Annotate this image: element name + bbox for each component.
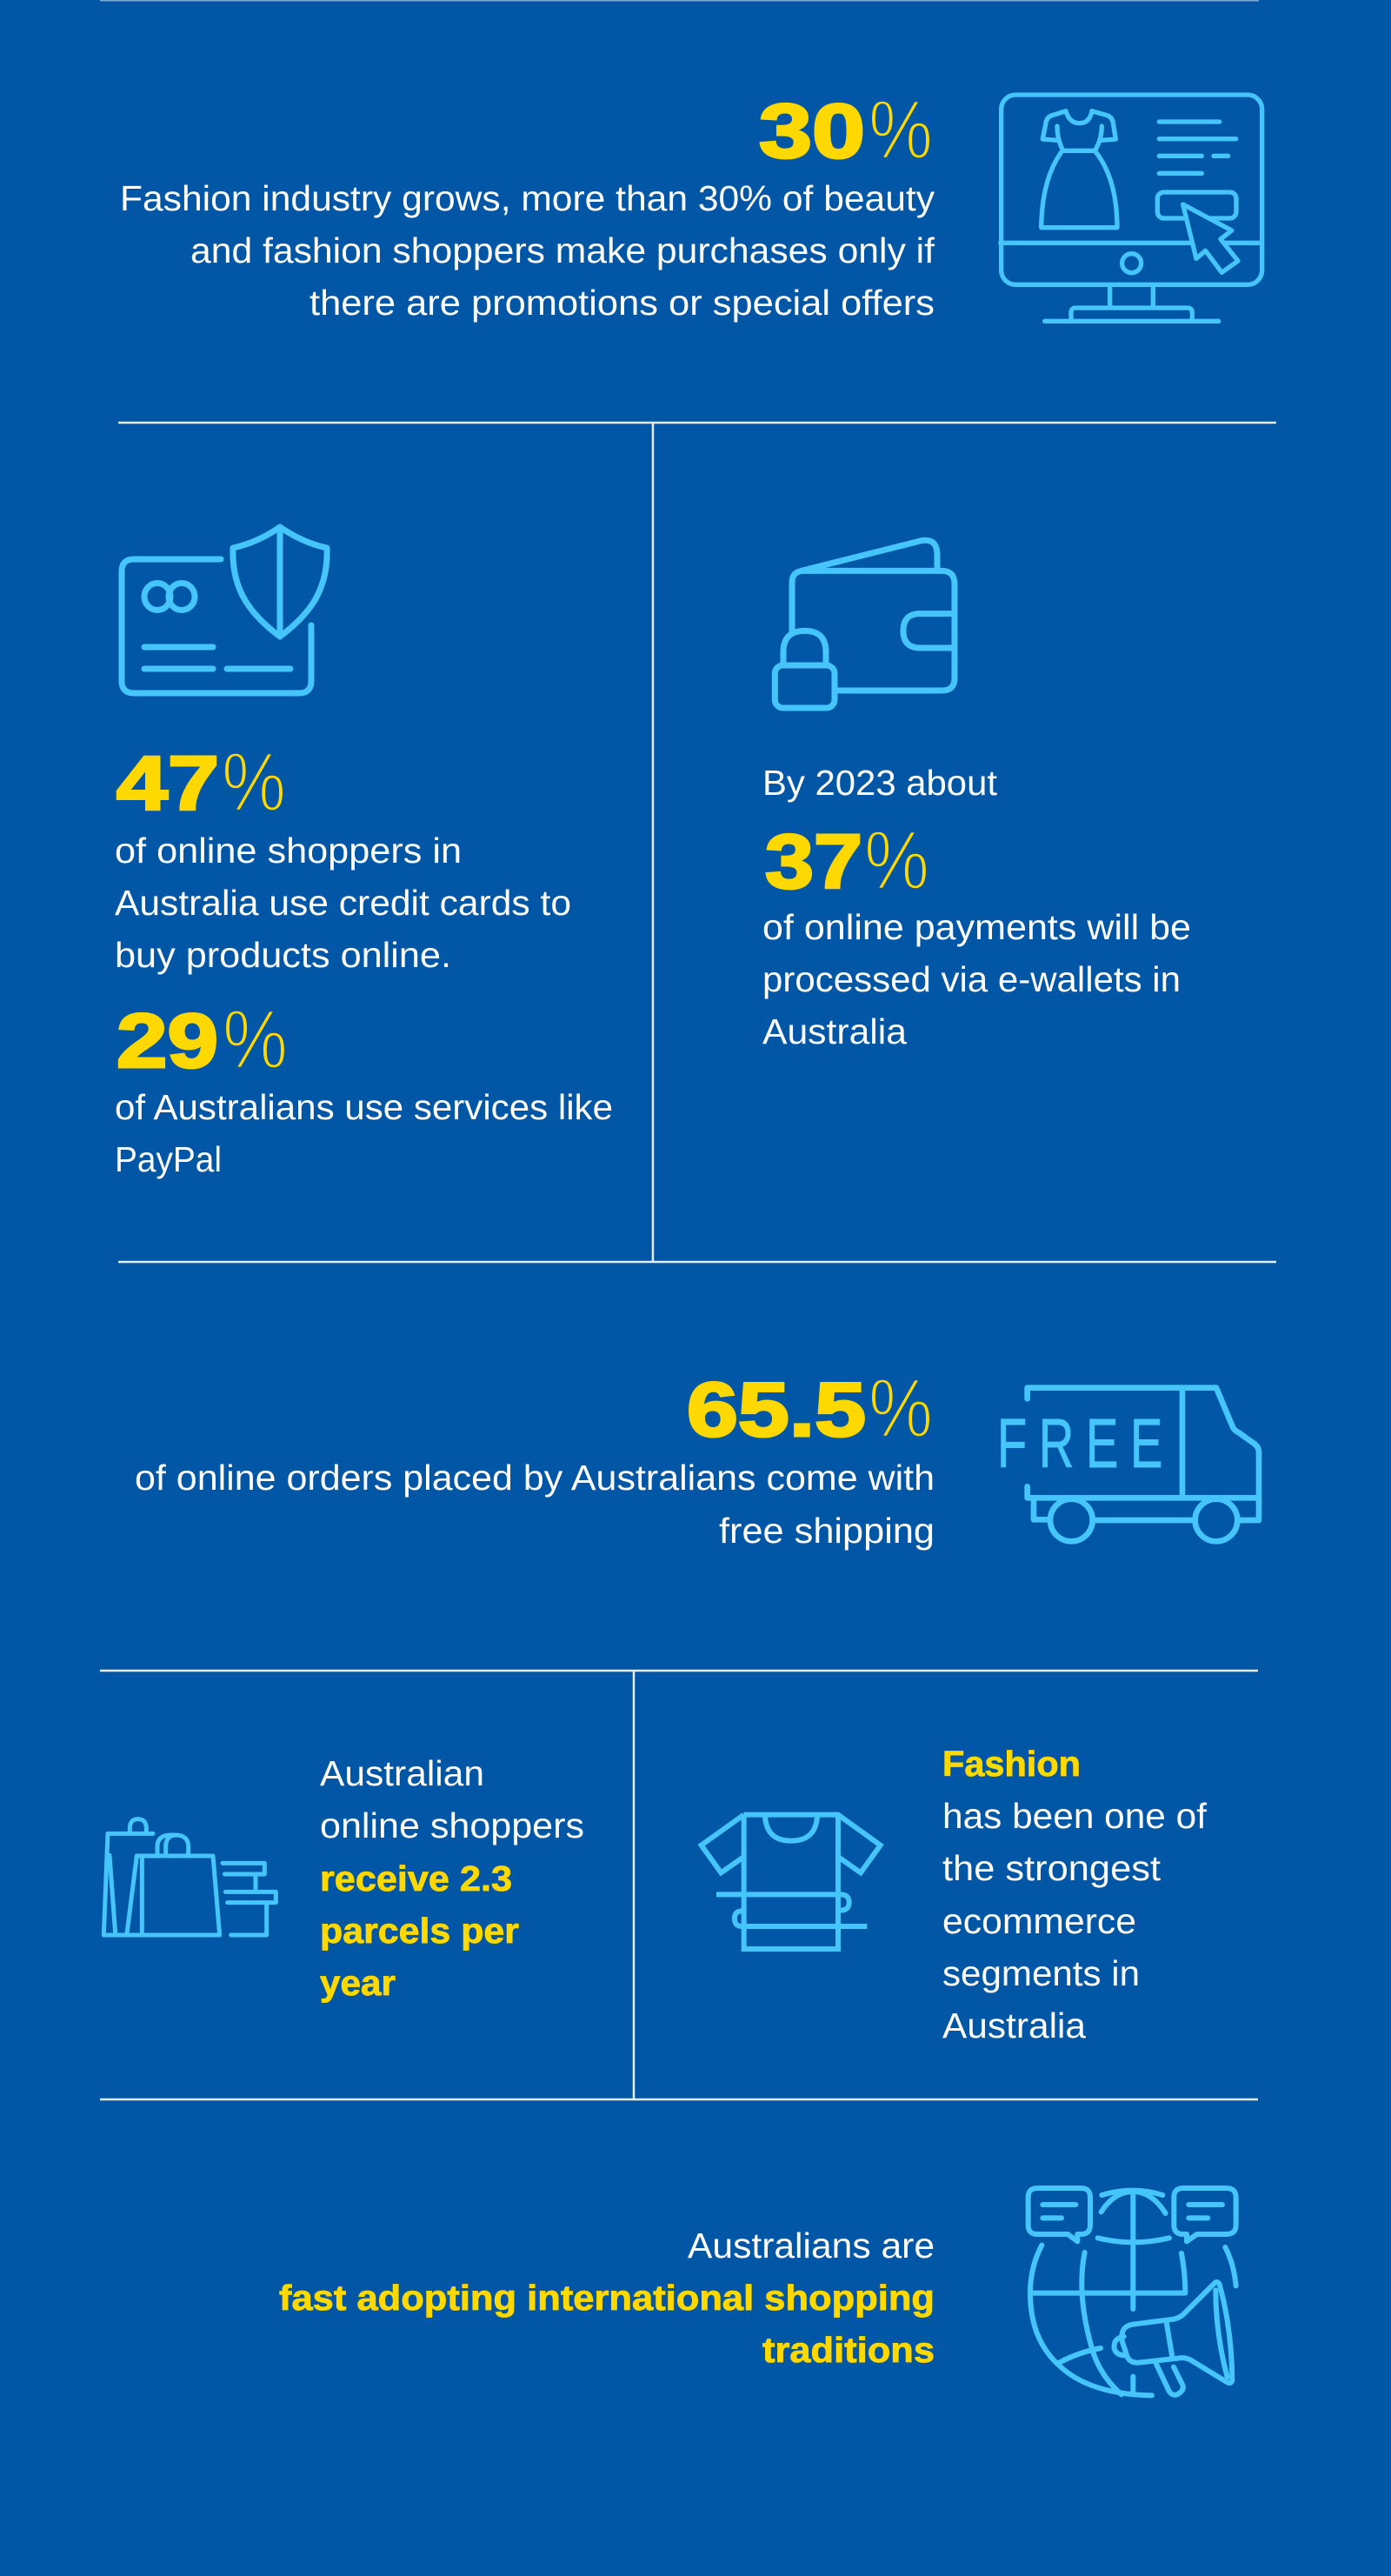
text: free shipping description: of online orders placed by Australians come with	[135, 1458, 935, 1498]
text: credit cards: of online shoppers in	[115, 831, 462, 871]
stat: 37%: %	[864, 814, 929, 907]
panel: international shopping	[279, 2188, 1236, 2395]
text: parcels: Australian	[320, 1753, 484, 1793]
text: PayPal: PayPal	[115, 1139, 222, 1179]
icon: globe with speech bubbles and megaphone	[1028, 2188, 1236, 2395]
text: credit cards	[115, 831, 571, 975]
icon: t-shirt	[702, 1815, 881, 1949]
text: fashion ecommerce: has been one of	[942, 1796, 1208, 1836]
text: fashion ecommerce: Fashion	[942, 1744, 1081, 1784]
text: parcels	[320, 1753, 584, 2003]
text: fashion ecommerce: ecommerce	[942, 1901, 1136, 1941]
text: fashion industry description: Fashion industry grows, more than 30% of beauty	[120, 178, 935, 218]
text: international traditions: Australians are	[688, 2226, 935, 2266]
panel: fashion promotions 30%	[120, 83, 1262, 323]
stat: 29%	[116, 993, 288, 1086]
panel: fashion segment	[702, 1744, 1208, 2045]
text: e-wallet payments: processed via e-wallets in	[762, 959, 1181, 999]
text: fashion ecommerce: the strongest	[942, 1848, 1161, 1888]
stat: 29%: 29	[116, 998, 218, 1084]
panel: credit cards and PayPal	[115, 527, 613, 1179]
panel: e-wallets	[762, 540, 1191, 1051]
text: PayPal	[115, 1087, 613, 1179]
text: e-wallet payments: Australia	[762, 1011, 907, 1051]
stat: 30%: 30	[759, 88, 865, 174]
stat: 30%	[759, 83, 933, 177]
text: PayPal: of Australians use services like	[115, 1087, 613, 1127]
icon: credit card with shield	[122, 527, 327, 693]
stat: 37%: 37	[765, 818, 862, 904]
text: parcels: parcels per	[320, 1911, 519, 1951]
icon: free delivery truck	[997, 1388, 1259, 1541]
icon: wallet with padlock	[775, 540, 955, 708]
text: fashion industry description: and fashion shoppers make purchases only if	[190, 230, 935, 270]
stat: 65.5%: %	[869, 1362, 933, 1455]
text: international traditions	[279, 2226, 935, 2370]
panel: free shipping	[135, 1362, 1259, 1551]
text: parcels: receive 2.3	[320, 1859, 512, 1899]
stat: 65.5%	[687, 1362, 933, 1455]
text: free shipping description: free shipping	[719, 1511, 935, 1551]
stat: 37%	[765, 814, 929, 907]
text: credit cards: Australia use credit cards to	[115, 883, 571, 923]
stat: 47%: %	[222, 736, 286, 829]
text: free shipping description	[135, 1458, 935, 1551]
stat: 47%	[116, 736, 286, 829]
stat: 29%: %	[223, 993, 288, 1086]
text: international traditions: fast adopting international shopping	[279, 2278, 935, 2318]
text: international traditions: traditions	[762, 2330, 935, 2370]
panel: parcels per year	[103, 1753, 584, 2003]
text: fashion industry description: there are promotions or special offers	[309, 283, 935, 323]
stat: 65.5%: 65.5	[687, 1366, 866, 1452]
text: e-wallet payments: of online payments will be	[762, 907, 1191, 947]
text: parcels: year	[320, 1963, 396, 2003]
icon: free delivery truck: FREE	[997, 1404, 1175, 1482]
text: credit cards: buy products online.	[115, 935, 451, 975]
text: parcels: online shoppers	[320, 1805, 584, 1845]
stat: 30%: %	[869, 83, 933, 177]
text: fashion ecommerce: Australia	[942, 2005, 1086, 2045]
text: fashion industry description	[120, 178, 935, 323]
text: fashion ecommerce: segments in	[942, 1953, 1140, 1993]
stat: 47%: 47	[116, 740, 219, 826]
icon: shopping bags and boxes	[103, 1819, 276, 1935]
icon: monitor with dress and cursor	[1001, 95, 1262, 321]
text: e-wallet payments	[762, 907, 1191, 1051]
text: by 2023 about: By 2023 about	[762, 763, 998, 803]
text: fashion ecommerce	[942, 1744, 1208, 2045]
